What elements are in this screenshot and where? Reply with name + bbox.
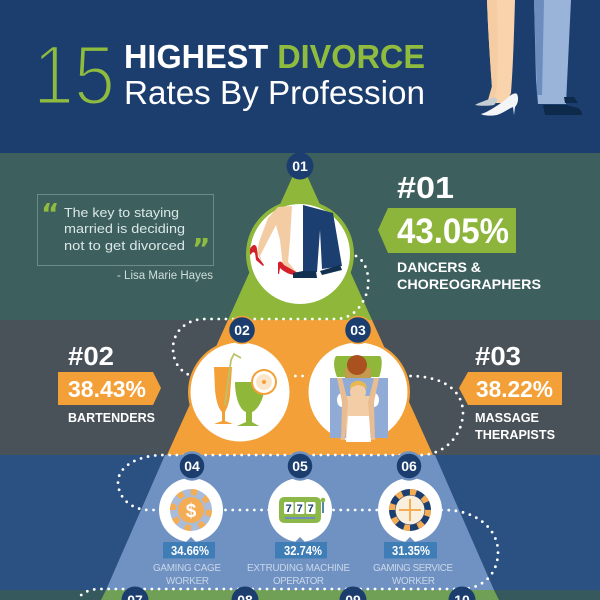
quote box: not to get divorced: [64, 238, 185, 253]
profession 06 label: 31.35%: [392, 543, 430, 558]
number badges: 02: [234, 322, 250, 338]
icon: roulette wheel: [378, 478, 442, 543]
rank 01 callout: [378, 170, 541, 292]
icon: slot machine: [268, 478, 332, 543]
quote box: ”: [192, 232, 210, 265]
profession 04 label: 34.66%: [171, 543, 209, 558]
quote box: “: [41, 197, 59, 230]
rank 03 callout: [459, 341, 562, 442]
rank 02 callout: BARTENDERS: [68, 410, 155, 425]
number badges: [122, 152, 476, 600]
title: Rates By Profession: [124, 74, 425, 111]
profession 06 label: [373, 542, 453, 587]
icon: gaming chip: $: [186, 501, 197, 522]
icon: slot machine: 7: [308, 503, 314, 515]
rank 02 callout: 38.43%: [68, 376, 146, 402]
rank 03 callout: #03: [475, 341, 521, 371]
icon: bartender circle: [188, 340, 292, 444]
rank 03 callout: MASSAGE: [475, 410, 539, 425]
icon: dancers circle: [246, 200, 354, 308]
quote box: - Lisa Marie Hayes: [117, 270, 213, 282]
rank 02 callout: #02: [68, 341, 114, 371]
icon: massage circle: [306, 340, 410, 444]
rank 02 callout: [58, 341, 161, 425]
title: [33, 28, 425, 122]
profession 04 label: WORKER: [166, 576, 209, 587]
icon: gaming chip: [159, 478, 223, 543]
number badges: 05: [292, 458, 308, 474]
profession 05 label: 32.74%: [284, 543, 322, 558]
title: HIGHEST DIVORCE: [124, 38, 425, 75]
quote box: married is deciding: [64, 221, 185, 236]
title: 15: [33, 28, 115, 122]
icon: slot machine: 7: [297, 503, 303, 515]
rank 03 callout: THERAPISTS: [475, 427, 555, 442]
profession 05 label: OPERATOR: [273, 576, 324, 587]
number badges: 06: [401, 458, 417, 474]
dotted connector: [79, 256, 498, 597]
rank 03 callout: 38.22%: [476, 376, 553, 402]
profession 06 label: GAMING SERVICE: [373, 563, 453, 574]
quote box: The key to staying: [64, 205, 179, 220]
quote box: [38, 194, 214, 282]
rank 01 callout: 43.05%: [397, 212, 509, 251]
icon: slot machine: 7: [286, 503, 292, 515]
number badges: 03: [350, 322, 366, 338]
profession 05 label: EXTRUDING MACHINE: [247, 563, 350, 574]
profession 06 label: WORKER: [392, 576, 435, 587]
rank 01 callout: CHOREOGRAPHERS: [397, 276, 541, 292]
profession 04 label: GAMING CAGE: [153, 563, 221, 574]
illustration: couple legs: [475, 0, 582, 116]
number badges: 04: [184, 458, 200, 474]
profession 04 label: [153, 542, 221, 587]
profession 05 label: [247, 542, 350, 587]
pyramid: [101, 160, 499, 600]
rank 01 callout: #01: [397, 170, 454, 205]
number badges: 01: [292, 158, 308, 174]
rank 01 callout: DANCERS &: [397, 259, 481, 275]
